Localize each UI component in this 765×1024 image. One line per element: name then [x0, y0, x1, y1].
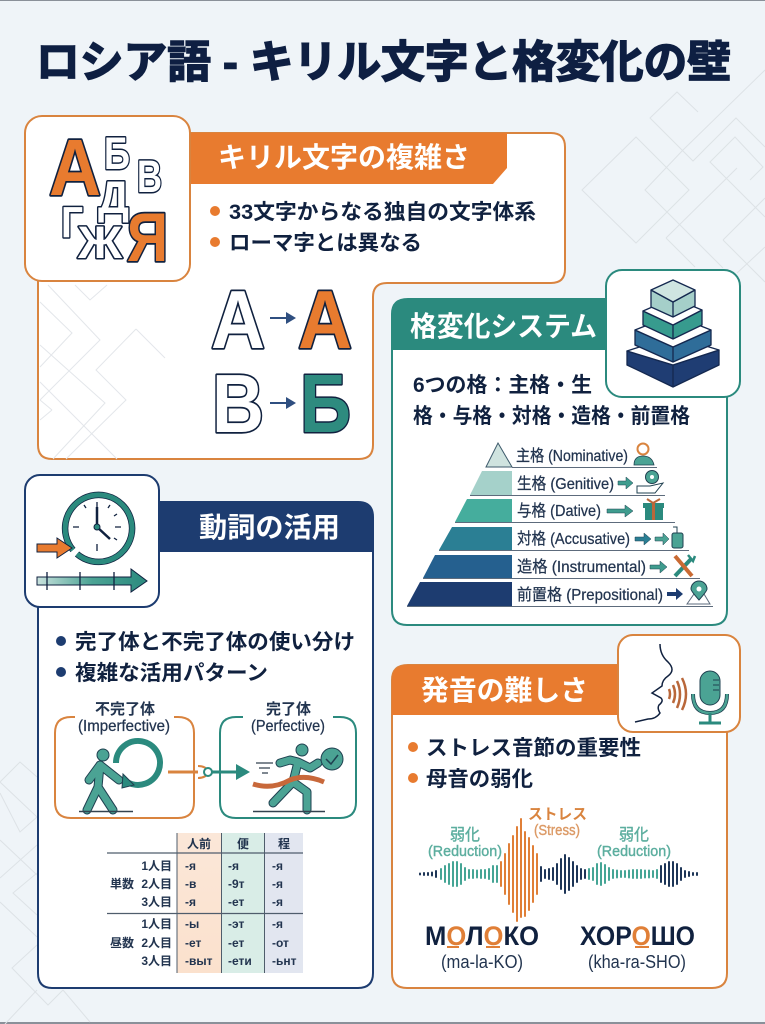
panel: pronunciation	[392, 635, 740, 988]
letter comparison: А	[298, 273, 352, 366]
title: ロシア語 - キリル文字と格変化の壁	[36, 38, 731, 87]
header band	[180, 133, 507, 184]
heading: キリル文字の複雑さ	[218, 142, 470, 173]
case labels: 与格 (Dative)	[517, 502, 601, 520]
case labels: 前置格 (Prepositional)	[517, 586, 663, 604]
conjugation table: -ьнт	[272, 954, 297, 968]
header band	[150, 502, 373, 552]
icon box: letters: Б	[104, 128, 130, 179]
case labels: 主格 (Nominative)	[516, 447, 628, 465]
stress and reduction labels	[428, 806, 671, 860]
case pyramid	[407, 443, 713, 606]
header band	[392, 299, 612, 350]
conjugation table: 単数	[110, 876, 134, 891]
heading: 格変化システム	[410, 311, 597, 342]
icon box: letters: В	[137, 151, 162, 202]
icon: walking figure and loop	[79, 741, 160, 812]
conjugation table: -ети	[228, 954, 252, 968]
conjugation table: -9т	[228, 877, 245, 891]
icon box: clock and timeline	[25, 475, 159, 607]
conjugation table: 1人目	[141, 859, 172, 873]
example word: khorosho: ХОРОШО	[580, 921, 695, 951]
panel: case system	[392, 270, 740, 625]
conjugation table: -я	[272, 859, 283, 873]
case labels	[516, 447, 663, 604]
conjugation table: -выт	[185, 954, 213, 968]
conjugation table: -ы	[185, 917, 199, 931]
conjugation table: -я	[228, 859, 239, 873]
icon box: letters: А	[49, 123, 101, 212]
bullet list	[408, 737, 641, 791]
icon box: letters: Г	[61, 198, 83, 247]
icon: runner and finish tape	[253, 744, 343, 812]
conjugation table: 便	[237, 837, 249, 851]
conjugation table: -ет	[228, 936, 245, 950]
example word: moloko: МОЛОКО	[425, 921, 539, 951]
conjugation table: -ет	[228, 895, 245, 909]
conjugation table: -я	[272, 877, 283, 891]
conjugation table: -я	[272, 917, 283, 931]
case list text: 格・与格・対格・造格・前置格	[413, 405, 690, 428]
bullet list	[56, 631, 355, 685]
bullet list: ストレス音節の重要性	[426, 737, 641, 760]
imperfective box: (Imperfective)	[78, 718, 170, 735]
conjugation table: -эт	[228, 917, 244, 931]
letter comparison: B	[212, 357, 264, 450]
icon box: letters	[25, 116, 190, 281]
stress and reduction labels: (Reduction)	[428, 843, 502, 860]
perfective box: 完了体	[266, 700, 311, 718]
conjugation table: 人前	[187, 836, 211, 851]
conjugation table: 1人目	[141, 917, 172, 931]
stress and reduction labels: ストレス	[528, 806, 587, 823]
icon: person	[634, 444, 654, 465]
conjugation table: -от	[272, 936, 289, 950]
bullet list: 母音の弱化	[426, 768, 533, 791]
conjugation table: 程	[278, 837, 290, 851]
letter comparison: Б	[300, 357, 351, 450]
perfective box: (Perfective)	[251, 718, 325, 735]
icon box: letters: Ж	[77, 217, 122, 268]
stress and reduction labels: 弱化	[450, 826, 480, 844]
icon box: letters: Д	[98, 171, 129, 223]
conjugation table: 3人目	[141, 954, 172, 968]
arrow: imperfective to perfective	[168, 764, 250, 780]
bullet list: 完了体と不完了体の使い分け	[75, 631, 355, 654]
panel frame	[38, 502, 373, 988]
conjugation table: 3人目	[141, 895, 172, 909]
conjugation table: -я	[185, 859, 196, 873]
panel frame	[392, 299, 727, 625]
perfective box	[220, 700, 356, 818]
case labels: 造格 (Instrumental)	[517, 558, 646, 576]
example word: khorosho	[580, 921, 695, 972]
imperfective box	[55, 700, 194, 818]
example word: moloko	[425, 921, 539, 972]
conjugation table: -ет	[185, 936, 202, 950]
icon box: speaking face and microphone	[618, 635, 740, 732]
header band	[392, 665, 625, 715]
case list text	[413, 374, 690, 428]
icon box: stacked blocks	[606, 270, 740, 397]
heading: 動詞の活用	[199, 512, 340, 543]
stress and reduction labels: 弱化	[619, 826, 649, 844]
imperfective box: 不完了体	[95, 700, 155, 718]
conjugation table: -я	[272, 895, 283, 909]
conjugation table: 2人目	[141, 936, 172, 950]
bullet list: 33文字からなる独自の文字体系	[229, 201, 536, 224]
panel: cyrillic letters	[25, 116, 565, 459]
icon: tools	[650, 555, 695, 576]
bullet list	[210, 201, 536, 255]
case list text: 6つの格：主格・生	[413, 374, 592, 397]
icon: map pin	[667, 581, 710, 604]
letter comparison	[211, 273, 352, 450]
bullet list: 複雑な活用パターン	[75, 662, 268, 685]
stress and reduction labels: (Stress)	[534, 822, 580, 839]
case labels: 対格 (Accusative)	[517, 530, 630, 548]
stress and reduction labels: (Reduction)	[597, 843, 671, 860]
case labels: 生格 (Genitive)	[517, 475, 614, 493]
panel frame	[392, 665, 727, 988]
example word: moloko: (ma-la-KO)	[441, 952, 523, 972]
conjugation table	[107, 833, 303, 973]
icon: bottle	[635, 527, 683, 548]
conjugation table: 2人目	[141, 877, 172, 891]
sound waveform	[420, 819, 697, 921]
conjugation table: -я	[185, 895, 196, 909]
example word: khorosho: (kha-ra-SHO)	[588, 952, 686, 972]
icon: hand and coin	[618, 470, 663, 493]
conjugation table: -в	[185, 877, 196, 891]
conjugation table: 昼数	[110, 935, 134, 950]
bullet list: ローマ字とは異なる	[229, 232, 422, 255]
panel: verb conjugation	[25, 475, 373, 988]
heading: 発音の難しさ	[421, 675, 588, 706]
icon box: letters: Я	[127, 199, 168, 276]
letter comparison: A	[211, 273, 265, 366]
icon: gift	[607, 499, 664, 520]
panel frame	[38, 133, 565, 459]
